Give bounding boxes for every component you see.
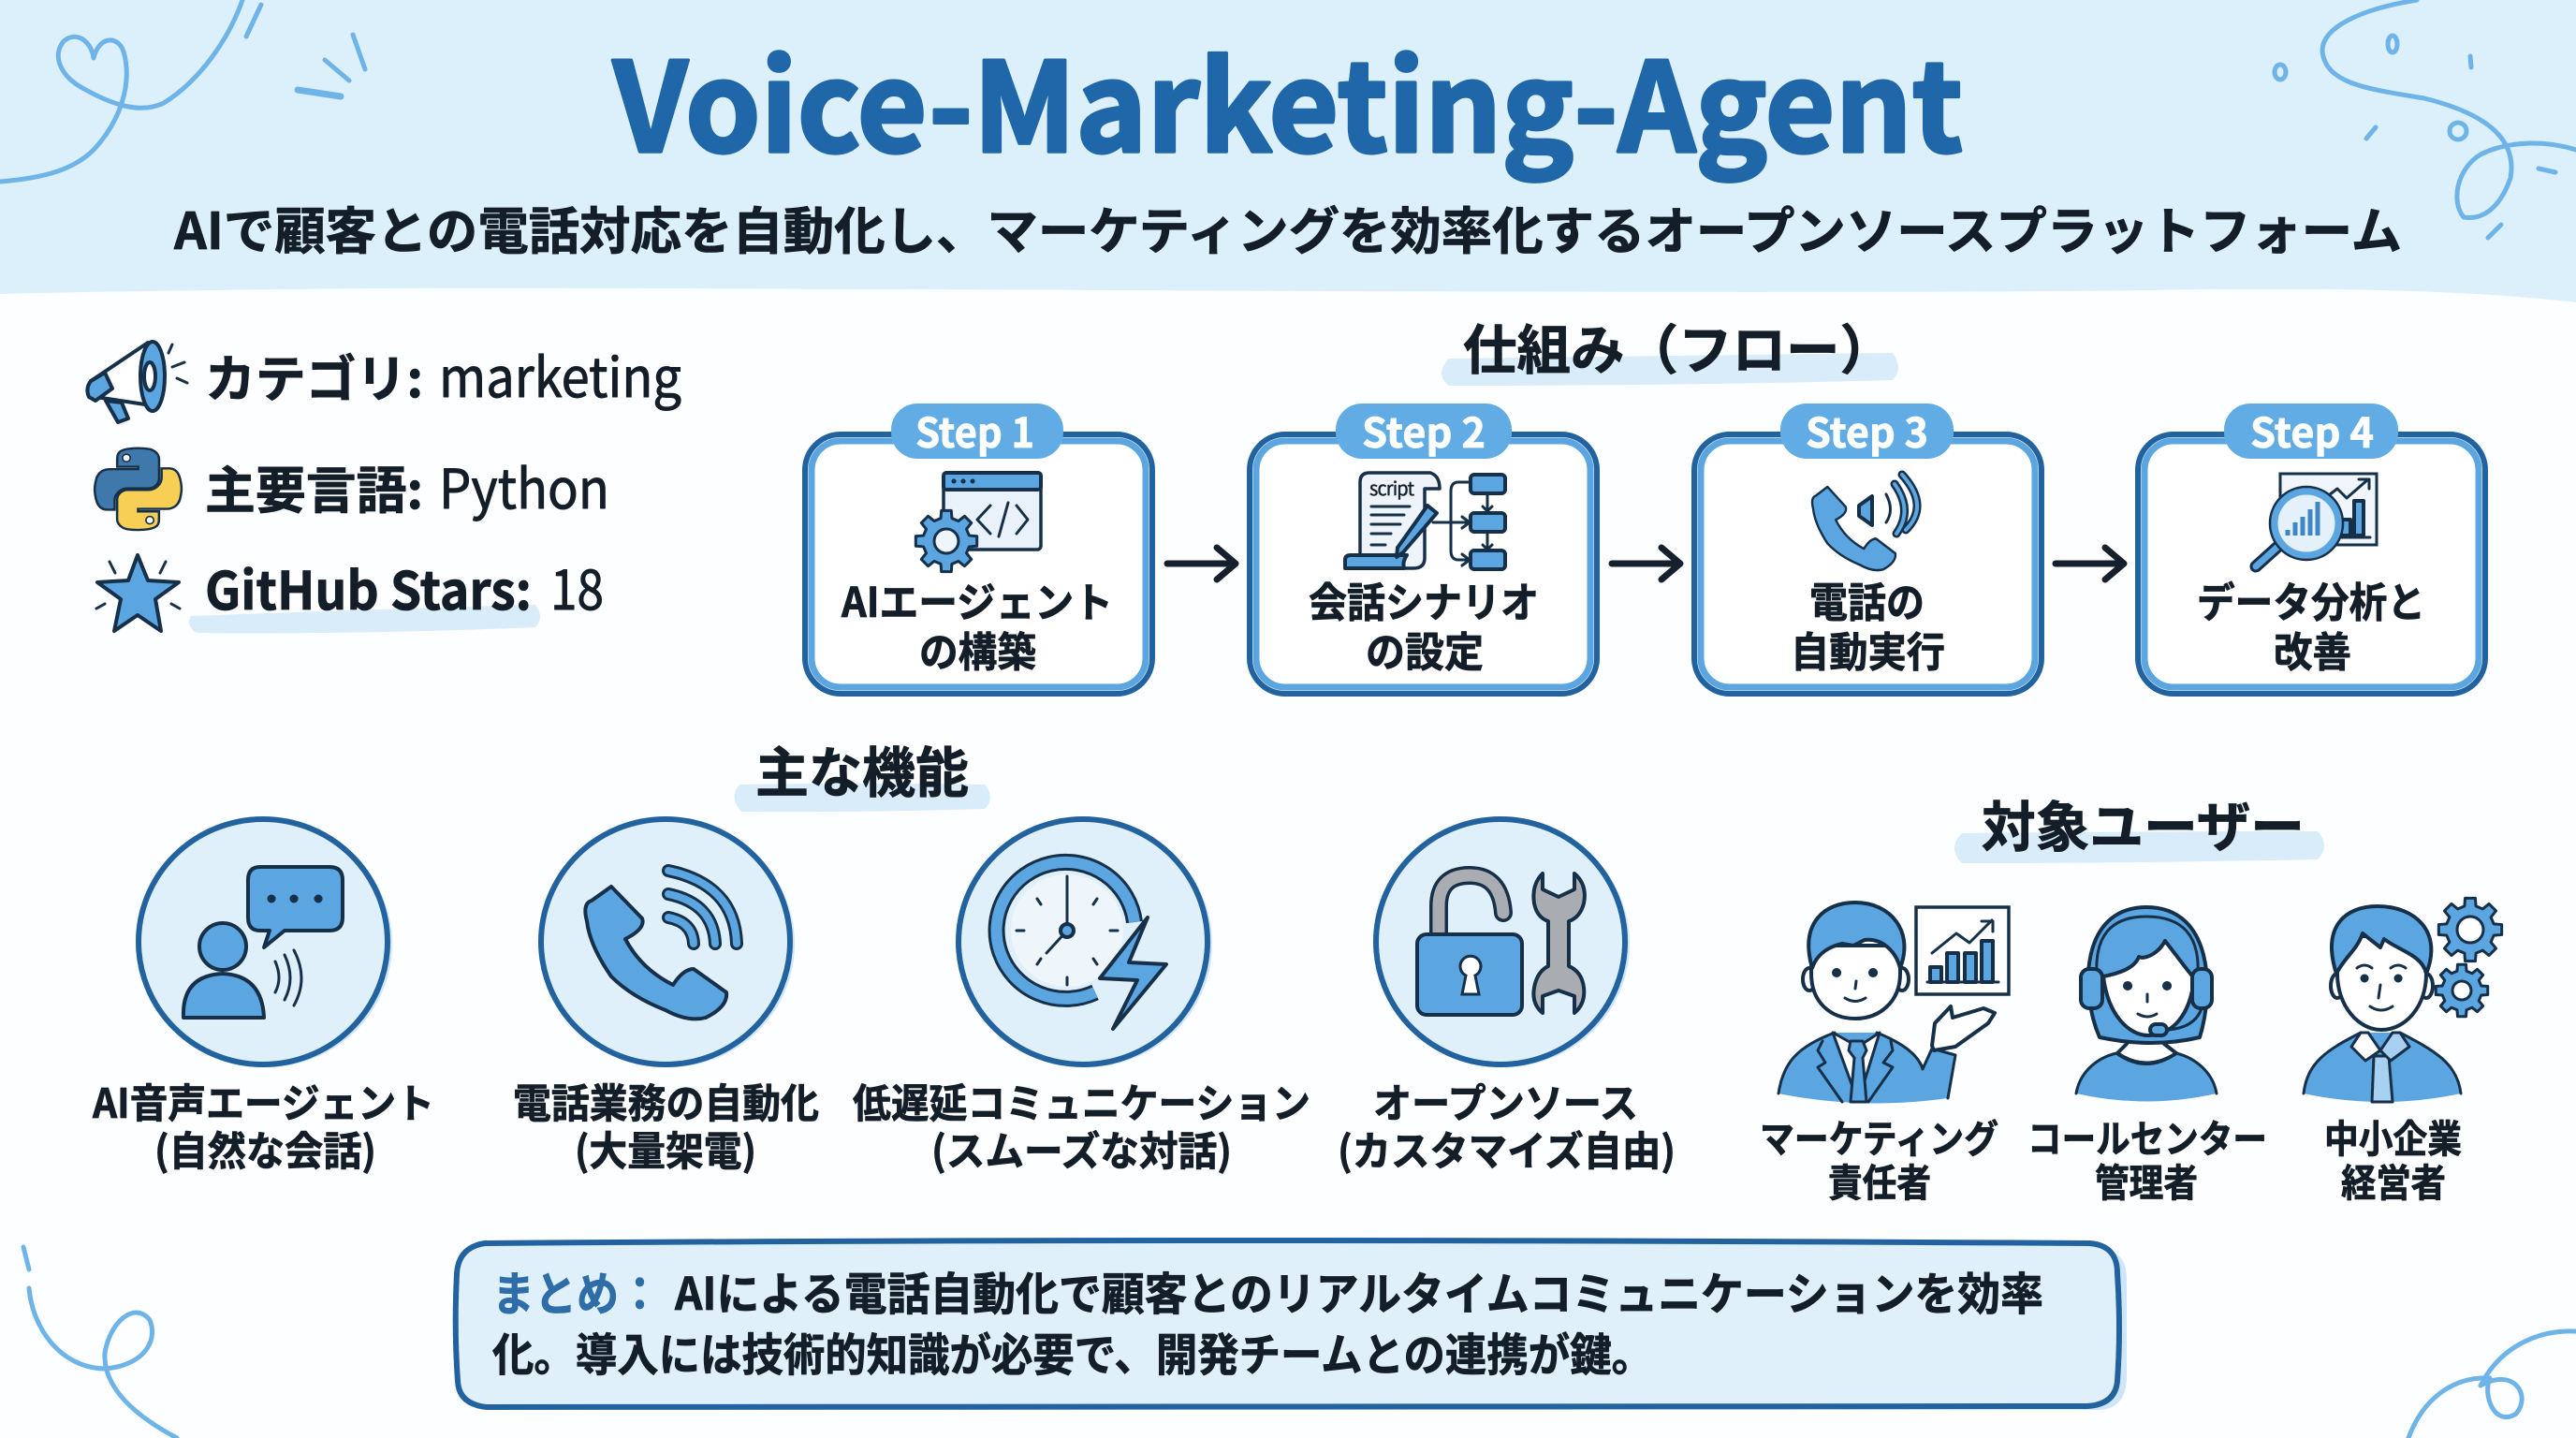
decoration: bottom-left squiggle <box>23 1247 177 1438</box>
feature 4 <box>1338 819 1676 1178</box>
header band <box>0 0 2576 302</box>
step 1: Step 1 <box>915 400 1034 460</box>
feature 2: 電話業務の自動化 <box>513 1072 819 1130</box>
user: marketing manager: マーケティング <box>1760 1108 1998 1164</box>
heading: flow: 仕組み（フロー） <box>1463 308 1894 385</box>
heading: users: 対象ユーザー <box>1982 784 2305 862</box>
user: marketing manager <box>1760 902 2009 1208</box>
step 4: 改善 <box>2274 619 2351 679</box>
feature 3: (スムーズな対話) <box>931 1120 1232 1178</box>
language label: Python <box>439 446 609 524</box>
panel: flow <box>805 308 2485 694</box>
feature 2: (大量架電) <box>575 1120 756 1178</box>
step 1: の構築 <box>919 619 1036 679</box>
feature 4: オープンソース <box>1373 1072 1638 1130</box>
user: marketing manager: 責任者 <box>1828 1152 1931 1208</box>
user: call center manager: コールセンター <box>2027 1108 2267 1164</box>
icon: code window and gear <box>915 473 1041 572</box>
step 1: AIエージェント <box>841 569 1113 629</box>
icon: person with chart <box>1778 902 2009 1103</box>
category label: カテゴリ: <box>205 338 423 412</box>
summary text <box>492 1257 2043 1384</box>
language label <box>205 446 609 524</box>
summary label: まとめ： <box>492 1257 661 1325</box>
step 3: 自動実行 <box>1791 619 1945 679</box>
step 3: 電話の <box>1809 569 1925 629</box>
step 2 <box>1250 400 1597 694</box>
feature 3: 低遅延コミュニケーション <box>853 1072 1310 1130</box>
arrow: step 2 to 3 <box>1612 548 1680 580</box>
summary text: 化。導入には技術的知識が必要で、開発チームとの連携が鍵。 <box>492 1318 1653 1384</box>
arrow: step 1 to 2 <box>1167 548 1236 580</box>
user: small business owner: 中小企業 <box>2324 1108 2462 1164</box>
user: call center manager <box>2027 907 2267 1208</box>
summary text: AIによる電話自動化で顧客とのリアルタイムコミュニケーションを効率 <box>674 1257 2043 1323</box>
decoration: top-left heart squiggle <box>0 0 365 182</box>
panel: features <box>92 729 1676 1178</box>
feature 4: (カスタマイズ自由) <box>1338 1120 1676 1178</box>
panel: project info <box>87 334 681 633</box>
user: small business owner <box>2304 898 2502 1208</box>
icon: script and flowchart <box>1345 473 1505 569</box>
panel: summary <box>456 1240 2127 1410</box>
icon: chart and magnifier <box>2256 474 2377 566</box>
icon: megaphone <box>87 342 187 422</box>
panel: target users <box>1760 784 2502 1208</box>
step 3 <box>1694 400 2042 694</box>
icon: phone with speaker <box>1812 475 1917 570</box>
step 1 <box>805 400 1152 694</box>
feature 1: (自然な会話) <box>154 1120 376 1178</box>
icon: person with headset <box>2076 907 2217 1101</box>
user: call center manager: 管理者 <box>2095 1152 2198 1208</box>
feature 1 <box>92 819 434 1178</box>
feature 2 <box>513 819 819 1178</box>
feature 1: AI音声エージェント <box>92 1072 434 1130</box>
step 2: の設定 <box>1366 619 1484 679</box>
feature 3 <box>853 819 1310 1178</box>
step 3: Step 3 <box>1806 400 1928 460</box>
heading: features: 主な機能 <box>755 729 969 808</box>
category label: marketing <box>439 334 681 413</box>
icon: person with gears <box>2304 898 2502 1102</box>
language label: 主要言語: <box>205 449 423 523</box>
category label <box>205 334 681 413</box>
subtitle: AIで顧客との電話対応を自動化し、マーケティングを効率化するオープンソースプラットフォーム <box>173 190 2402 264</box>
icon: open lock and wrench <box>1417 873 1585 1015</box>
step 2: 会話シナリオ <box>1309 569 1539 629</box>
step 4: Step 4 <box>2250 400 2374 460</box>
stars label: 18 <box>550 547 604 625</box>
highlight: stars <box>189 605 540 633</box>
icon: script and flowchart: script <box>1369 474 1414 501</box>
icon: phone <box>585 871 737 1019</box>
title: Voice-Marketing-Agent <box>612 9 1963 188</box>
icon: clock and lightning <box>997 862 1166 1029</box>
highlight: users heading <box>1954 831 2324 863</box>
step 4: データ分析と <box>2197 569 2425 629</box>
step 2: Step 2 <box>1362 400 1486 460</box>
user: small business owner: 経営者 <box>2341 1152 2446 1208</box>
stars label: GitHub Stars: <box>205 550 532 625</box>
decoration: bottom-right squiggle <box>2408 1331 2576 1438</box>
icon: star <box>96 555 180 631</box>
highlight: flow heading <box>1442 353 1898 386</box>
highlight: features heading <box>734 784 990 812</box>
step 4 <box>2138 400 2485 694</box>
icon: person speaking <box>183 867 343 1018</box>
icon: python logo <box>95 448 182 530</box>
arrow: step 3 to 4 <box>2056 548 2124 580</box>
decoration: top-right squiggle <box>2275 0 2576 238</box>
